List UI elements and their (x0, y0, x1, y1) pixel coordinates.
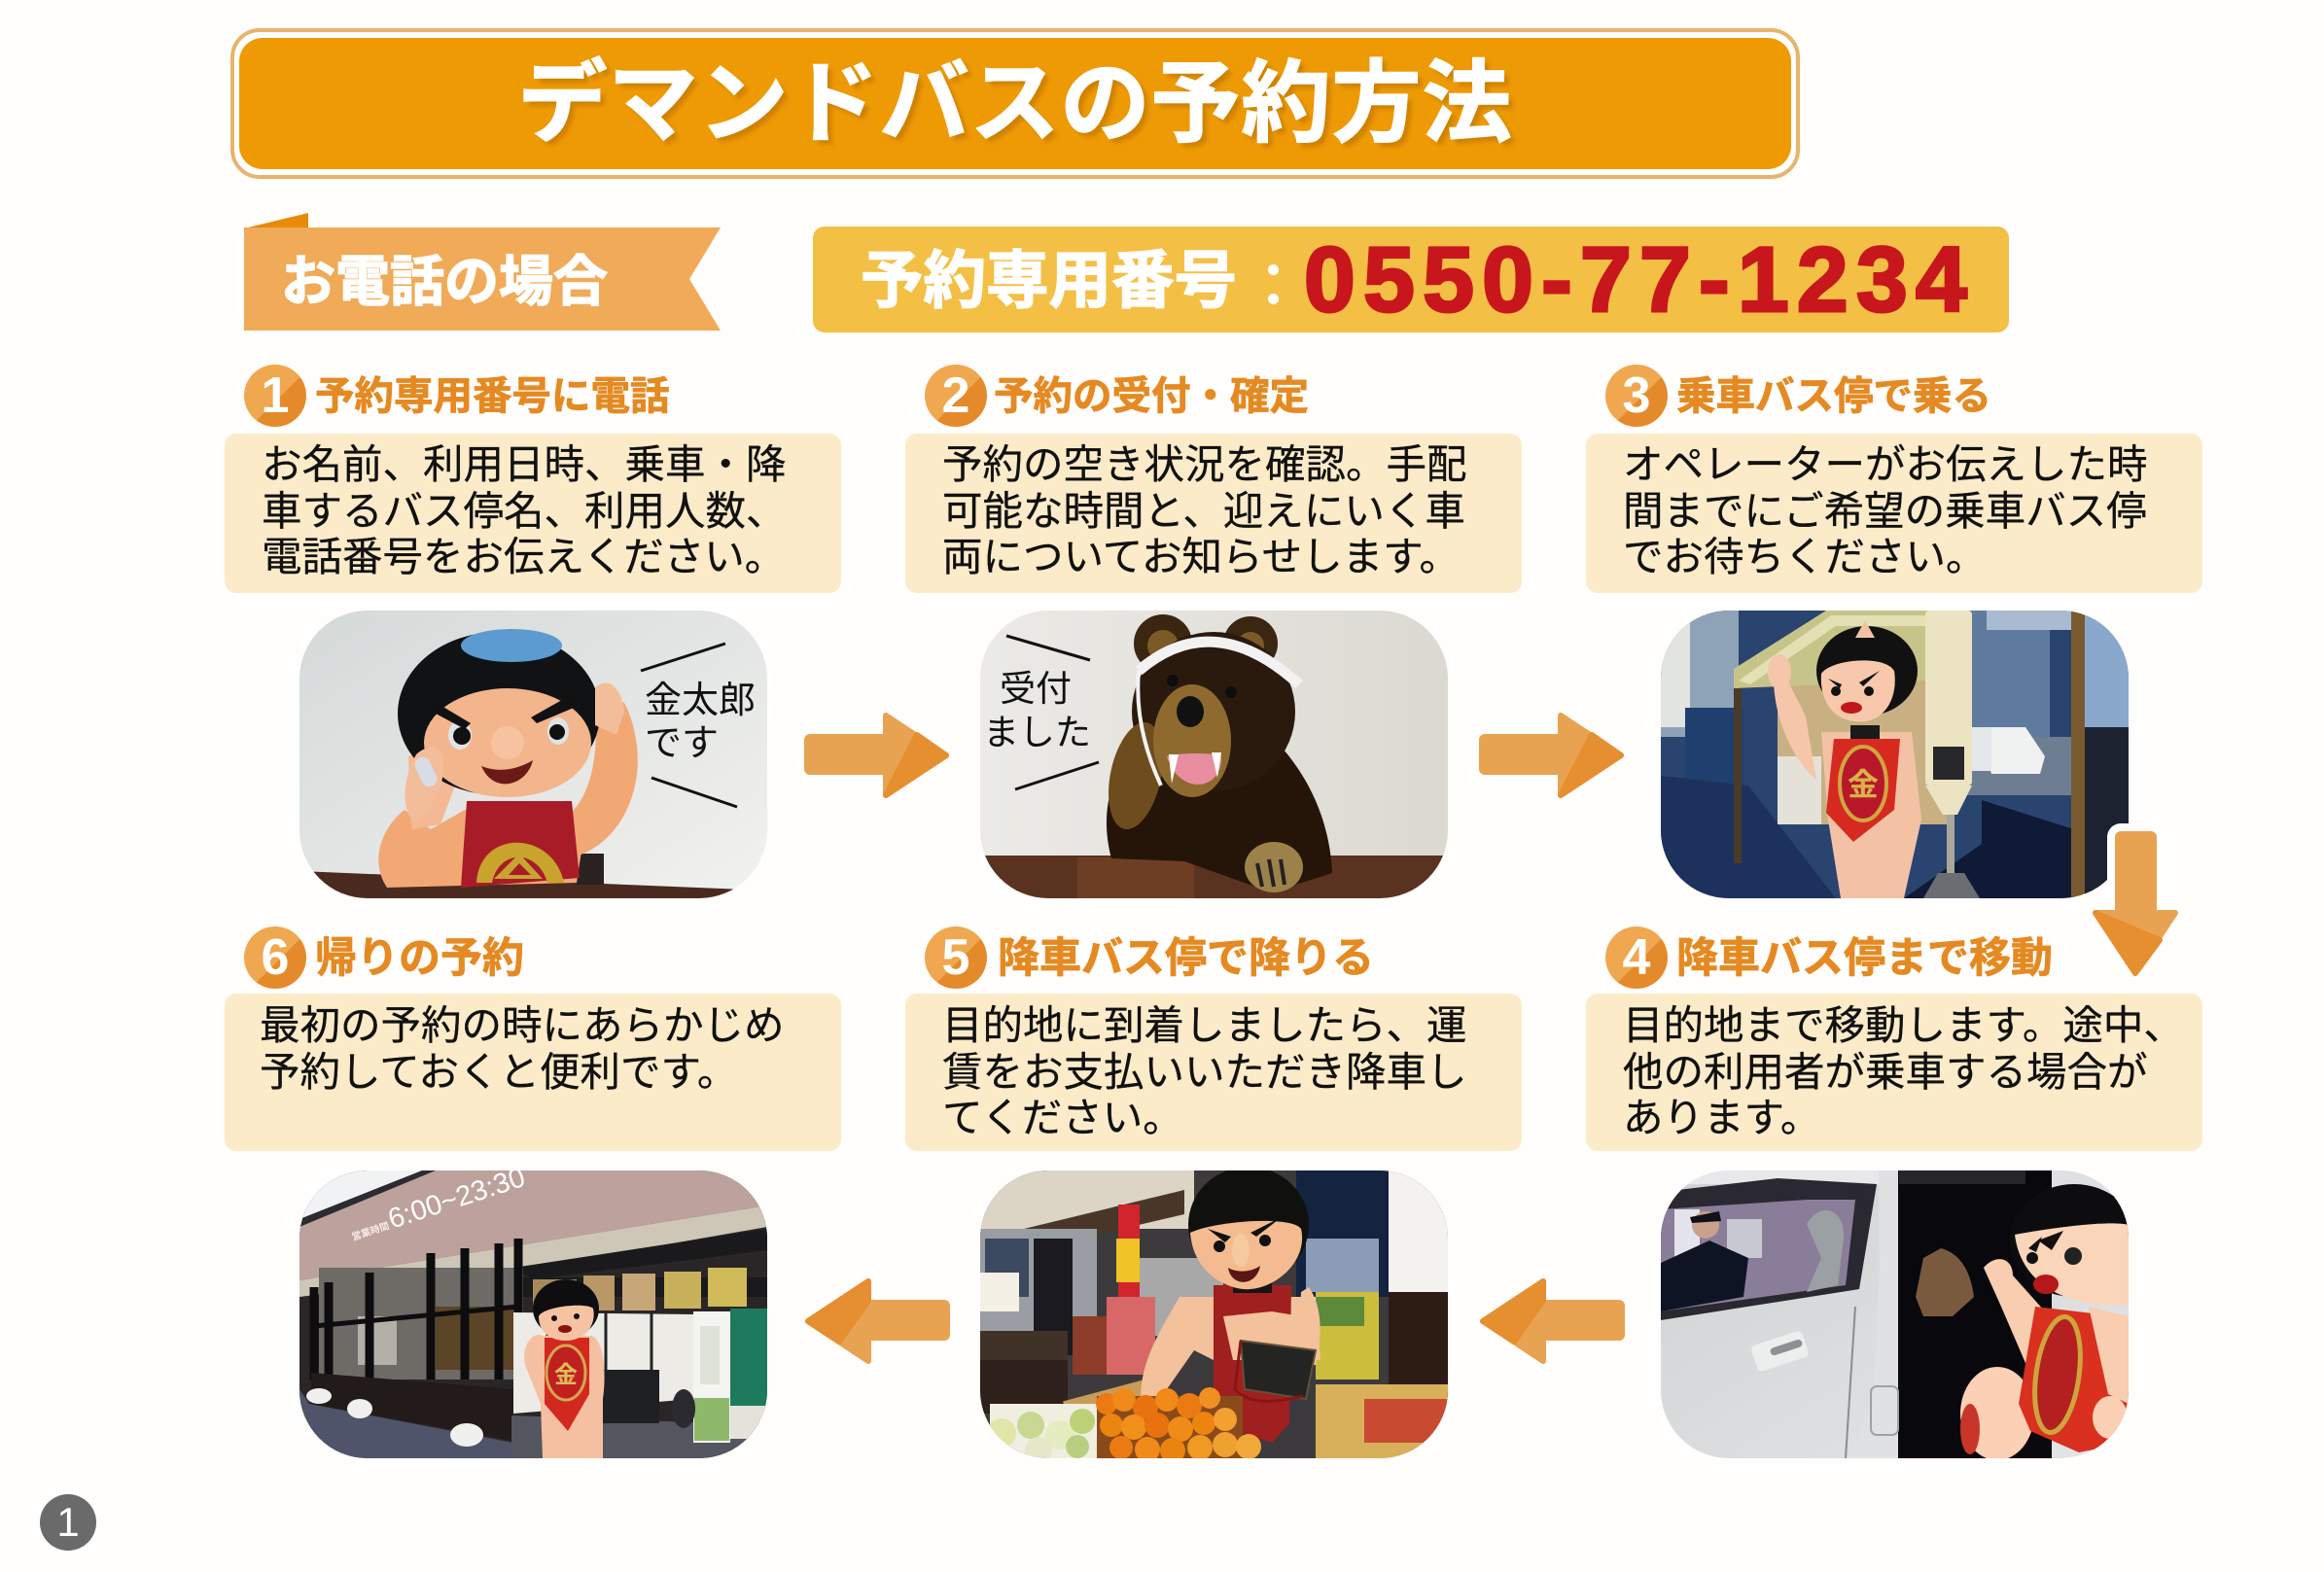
step 3 text: オペレーターがお伝えした時 (1623, 432, 2148, 490)
step 3 number: 3 (1623, 367, 1650, 424)
step 2 text (905, 434, 1522, 593)
step 3 text: 間までにご希望の乗車バス停 (1623, 478, 2147, 537)
step 6 number: 6 (262, 929, 289, 986)
step 5 number: 5 (942, 929, 969, 986)
page number badge: 1 (56, 1499, 80, 1545)
title banner (230, 28, 1800, 179)
panel: step 6 (225, 925, 841, 1458)
title text (239, 38, 1791, 169)
colon (1268, 264, 1279, 304)
title text: デマンドバスの予約方法 (517, 31, 1513, 160)
step 3 number (1605, 365, 1668, 427)
step 6 text (225, 994, 841, 1151)
photo: mascot shopping (980, 1170, 1448, 1458)
step 2 text: 可能な時間と、迎えにいく車 (942, 478, 1465, 537)
photo: bear receptionist (980, 611, 1448, 898)
arrow: step 4 to 5 (1480, 1278, 1625, 1364)
step 5 text: てください。 (942, 1085, 1183, 1143)
step 5 text: 賃をお支払いいただき降車し (942, 1038, 1467, 1097)
arrow: step 5 to 6 (805, 1278, 950, 1364)
step 2 number: 2 (942, 367, 969, 424)
step 4 text (1586, 994, 2202, 1151)
step 4 number (1605, 926, 1668, 989)
page number badge (40, 1494, 96, 1551)
step 5 number (925, 926, 987, 989)
photo: mascot at supermarket: 金 (554, 1355, 578, 1389)
step 4 number: 4 (1623, 929, 1650, 986)
step 2 number (925, 365, 987, 427)
step 4 heading: 降車バス停まで移動 (1676, 925, 2053, 985)
step 1 text: お名前、利用日時、乗車・降 (262, 432, 787, 490)
step 1 number (244, 365, 306, 427)
step 5 text (905, 994, 1522, 1151)
speech: 受付ました: 受付 (1000, 659, 1072, 712)
step 1 text: 車するバス停名、利用人数、 (262, 478, 787, 537)
reservation label: 予約専用番号 (861, 229, 1237, 321)
speech: 受付ました (983, 636, 1099, 789)
arrow: step 1 to 2 (804, 713, 949, 798)
step 1 heading: 予約専用番号に電話 (315, 364, 669, 421)
panel: step 5 (905, 925, 1522, 1458)
step 2 text: 予約の空き状況を確認。手配 (942, 432, 1467, 490)
photo: mascot at bus stop (1661, 611, 2129, 898)
photo: mascot and van (1661, 1170, 2129, 1458)
step 4 text: 目的地まで移動します。途中、 (1623, 993, 2184, 1051)
step 1 text (225, 434, 841, 593)
speech: 受付ました: ました (983, 703, 1091, 755)
photo: mascot at bus stop: 金 (1848, 760, 1879, 805)
speech: 金太郎です (641, 644, 756, 807)
photo: mascot on the phone (299, 611, 767, 898)
step 4 text: 他の利用者が乗車する場合が (1623, 1038, 2148, 1097)
phone number: 0550-77-1234 (1304, 228, 1975, 332)
step 6 text: 予約しておくと便利です。 (260, 1038, 737, 1097)
step 4 text: あります。 (1623, 1085, 1820, 1143)
step 2 heading: 予約の受付・確定 (994, 364, 1309, 421)
ribbon text: お電話の場合 (281, 238, 608, 317)
panel: step 2 (905, 364, 1522, 898)
ribbon: phone heading (244, 213, 721, 331)
step 3 text: でお待ちください。 (1623, 524, 1987, 582)
photo: mascot at supermarket (299, 1170, 767, 1458)
step 1 text: 電話番号をお伝えください。 (262, 524, 785, 582)
step 3 heading: 乗車バス停で乗る (1676, 364, 1991, 421)
step 5 text: 目的地に到着しましたら、運 (942, 993, 1467, 1051)
panel: step 1 (225, 364, 841, 898)
speech: 金太郎です: です (645, 713, 719, 766)
panel: step 3 (1586, 364, 2202, 898)
step 6 number (244, 926, 306, 989)
arrow: step 3 down to 4 (2093, 823, 2178, 976)
reservation number bar (813, 227, 2009, 332)
step 6 heading: 帰りの予約 (315, 925, 524, 985)
panel: step 4 (1586, 925, 2202, 1458)
step 3 text (1586, 434, 2202, 593)
arrow: step 2 to 3 (1479, 713, 1624, 798)
step 5 heading: 降車バス停で降りる (998, 925, 1374, 985)
speech: 金太郎です: 金太郎 (645, 670, 756, 723)
step 6 text: 最初の予約の時にあらかじめ (260, 993, 785, 1051)
photo: mascot at supermarket: 営業時間 (349, 1217, 391, 1243)
step 1 number: 1 (262, 367, 289, 424)
step 2 text: 両についてお知らせします。 (942, 524, 1460, 582)
